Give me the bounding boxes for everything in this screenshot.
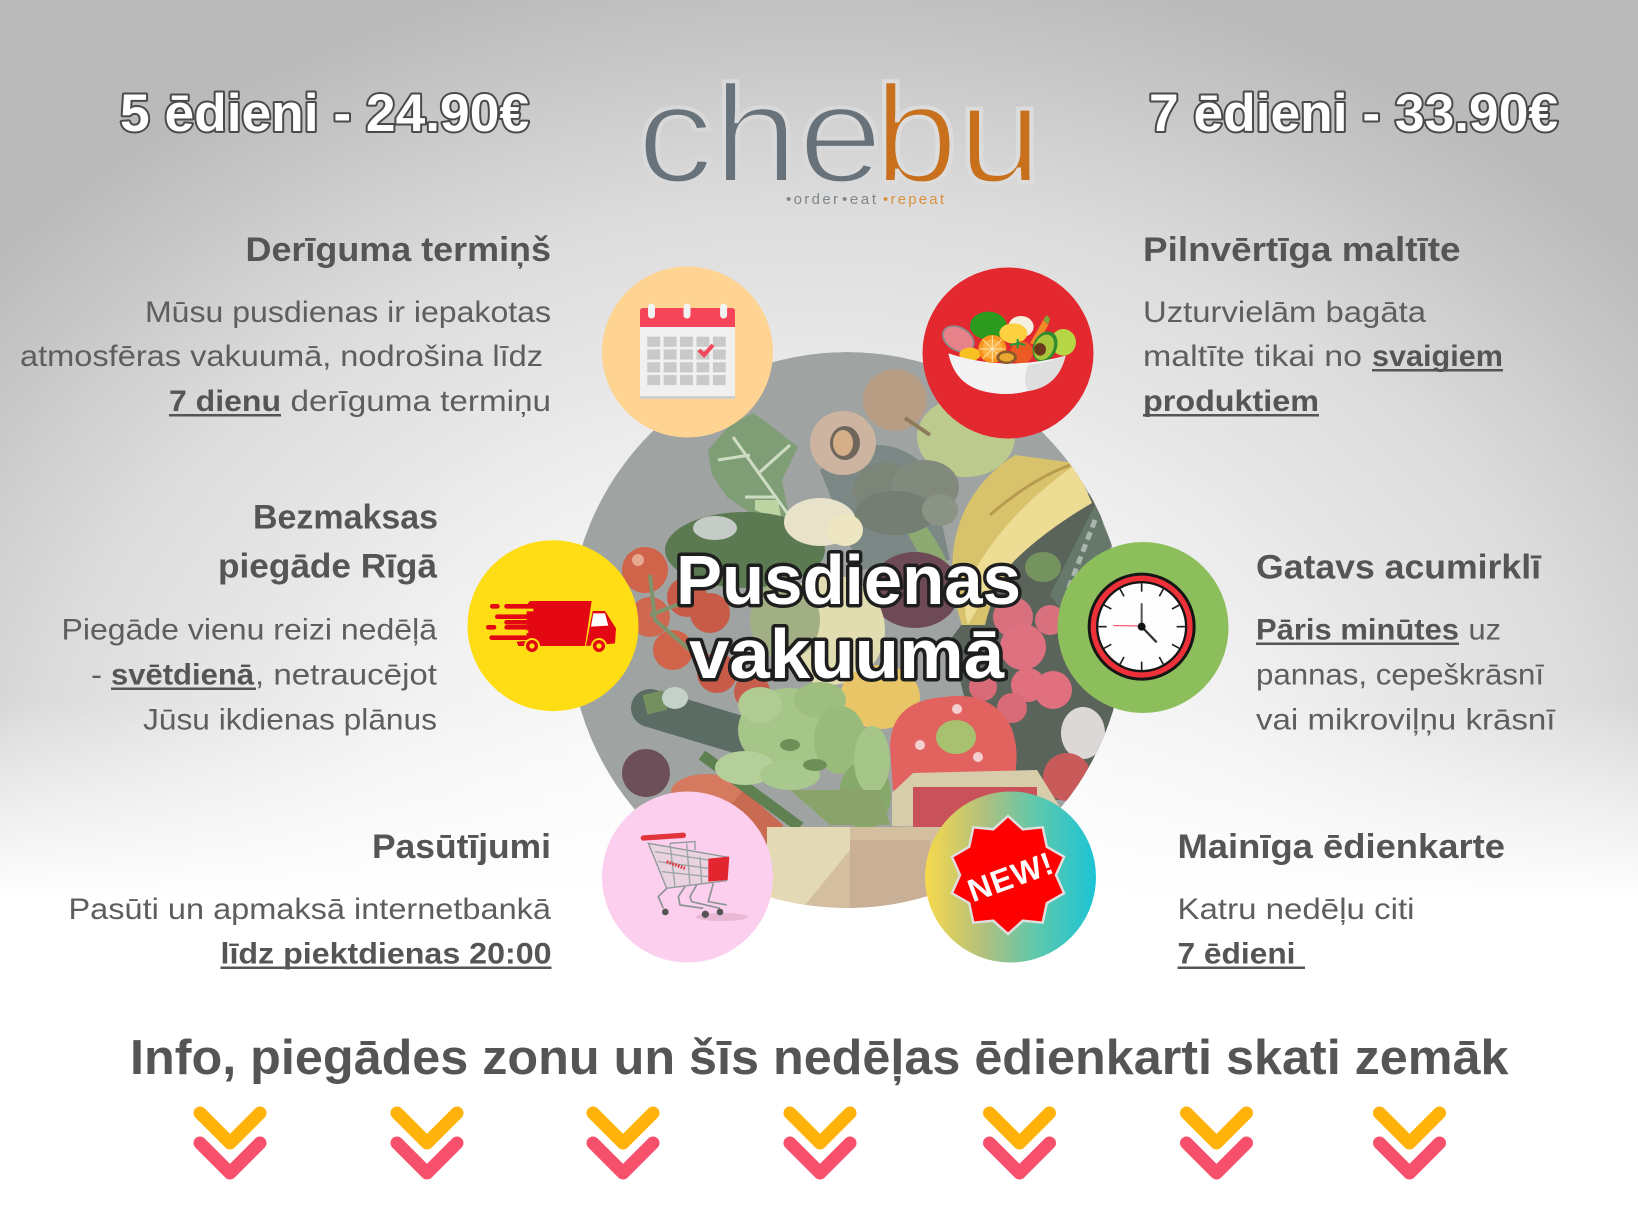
- text block: ready in a moment: pannas, cepeškrāsnī: [1256, 658, 1545, 692]
- icon: calendar: [602, 266, 773, 438]
- text block: ready in a moment: uz: [1468, 614, 1501, 646]
- title: Pusdienas vakuumā: Pusdienas: [676, 541, 1021, 619]
- arrow: chevrons 3: [593, 1113, 653, 1173]
- title: Pusdienas vakuumā: [676, 541, 1021, 693]
- icon: salad bowl: [922, 268, 1094, 438]
- arrow: chevrons 2: [397, 1113, 457, 1173]
- text block: free delivery: -: [91, 658, 102, 692]
- icon: shopping cart: [602, 792, 773, 962]
- logo: chebu: •order: [786, 191, 838, 208]
- text block: wholesome meal: svaigiem: [1372, 340, 1503, 373]
- title: Pusdienas vakuumā: vakuumā: [689, 615, 1005, 693]
- logo: chebu: •repeat: [883, 191, 945, 208]
- logo: chebu: che: [637, 57, 883, 212]
- icon: new badge: [925, 792, 1096, 962]
- text block: free delivery: piegāde Rīgā: [218, 548, 438, 586]
- text block: orders: Pasūtījumi: [372, 828, 551, 866]
- arrow: chevrons 1: [200, 1113, 260, 1173]
- text block: free delivery: [62, 498, 438, 736]
- text block: wholesome meal: maltīte tikai no: [1143, 340, 1362, 373]
- arrow: chevrons 7: [1380, 1113, 1440, 1173]
- text block: shelf life: [20, 231, 551, 418]
- text block: wholesome meal: [1143, 231, 1503, 418]
- arrow: chevrons 6: [1186, 1113, 1246, 1173]
- text block: shelf life: derīguma termiņu: [290, 385, 551, 418]
- bottom heading: Info, piegādes zonu un šīs nedēļas ēdienkarti skati zemāk: [130, 1031, 1509, 1085]
- text block: free delivery: Piegāde vienu reizi nedēļā: [62, 614, 437, 646]
- text block: free delivery: Bezmaksas: [253, 498, 438, 536]
- arrow: chevrons 5: [990, 1113, 1050, 1173]
- text block: shelf life: Derīguma termiņš: [246, 231, 551, 269]
- text block: ready in a moment: Pāris minūtes: [1256, 614, 1459, 646]
- icon: new badge: NEW!: [963, 845, 1058, 909]
- text block: free delivery: svētdienā: [111, 658, 254, 692]
- price: 5 meals: 5 ēdieni - 24.90€: [120, 84, 529, 143]
- logo: chebu: •eat: [842, 191, 877, 208]
- text block: shelf life: atmosfēras vakuumā, nodrošina līdz: [20, 340, 543, 373]
- arrow: chevrons 4: [790, 1113, 850, 1173]
- text block: free delivery: , netraucējot: [255, 658, 438, 692]
- text block: orders: [68, 828, 552, 970]
- text block: shelf life: Mūsu pusdienas ir iepakotas: [145, 296, 551, 329]
- text block: changing menu: 7 ēdieni: [1178, 938, 1296, 970]
- price: 7 meals: 7 ēdieni - 33.90€: [1149, 84, 1558, 143]
- text block: changing menu: Mainīga ēdienkarte: [1178, 828, 1505, 866]
- text block: wholesome meal: Pilnvērtīga maltīte: [1143, 231, 1460, 269]
- text block: orders: Pasūti un apmaksā internetbankā: [68, 893, 551, 926]
- icon: delivery truck: [468, 540, 638, 711]
- text block: ready in a moment: [1256, 548, 1556, 736]
- text block: free delivery: Jūsu ikdienas plānus: [143, 704, 437, 736]
- food photo circle: [569, 352, 1130, 917]
- icon: clock: [1058, 542, 1228, 713]
- logo: chebu: bu: [874, 57, 1042, 212]
- text block: ready in a moment: vai mikroviļņu krāsnī: [1256, 704, 1556, 736]
- text block: shelf life: 7 dienu: [169, 385, 281, 418]
- text block: changing menu: [1178, 828, 1505, 970]
- text block: changing menu: Katru nedēļu citi: [1178, 893, 1414, 926]
- text block: orders: līdz piektdienas 20:00: [220, 938, 552, 970]
- logo: chebu: [637, 57, 1042, 212]
- text block: wholesome meal: produktiem: [1143, 385, 1319, 418]
- text block: ready in a moment: Gatavs acumirklī: [1256, 548, 1542, 586]
- text block: wholesome meal: Uzturvielām bagāta: [1143, 296, 1426, 329]
